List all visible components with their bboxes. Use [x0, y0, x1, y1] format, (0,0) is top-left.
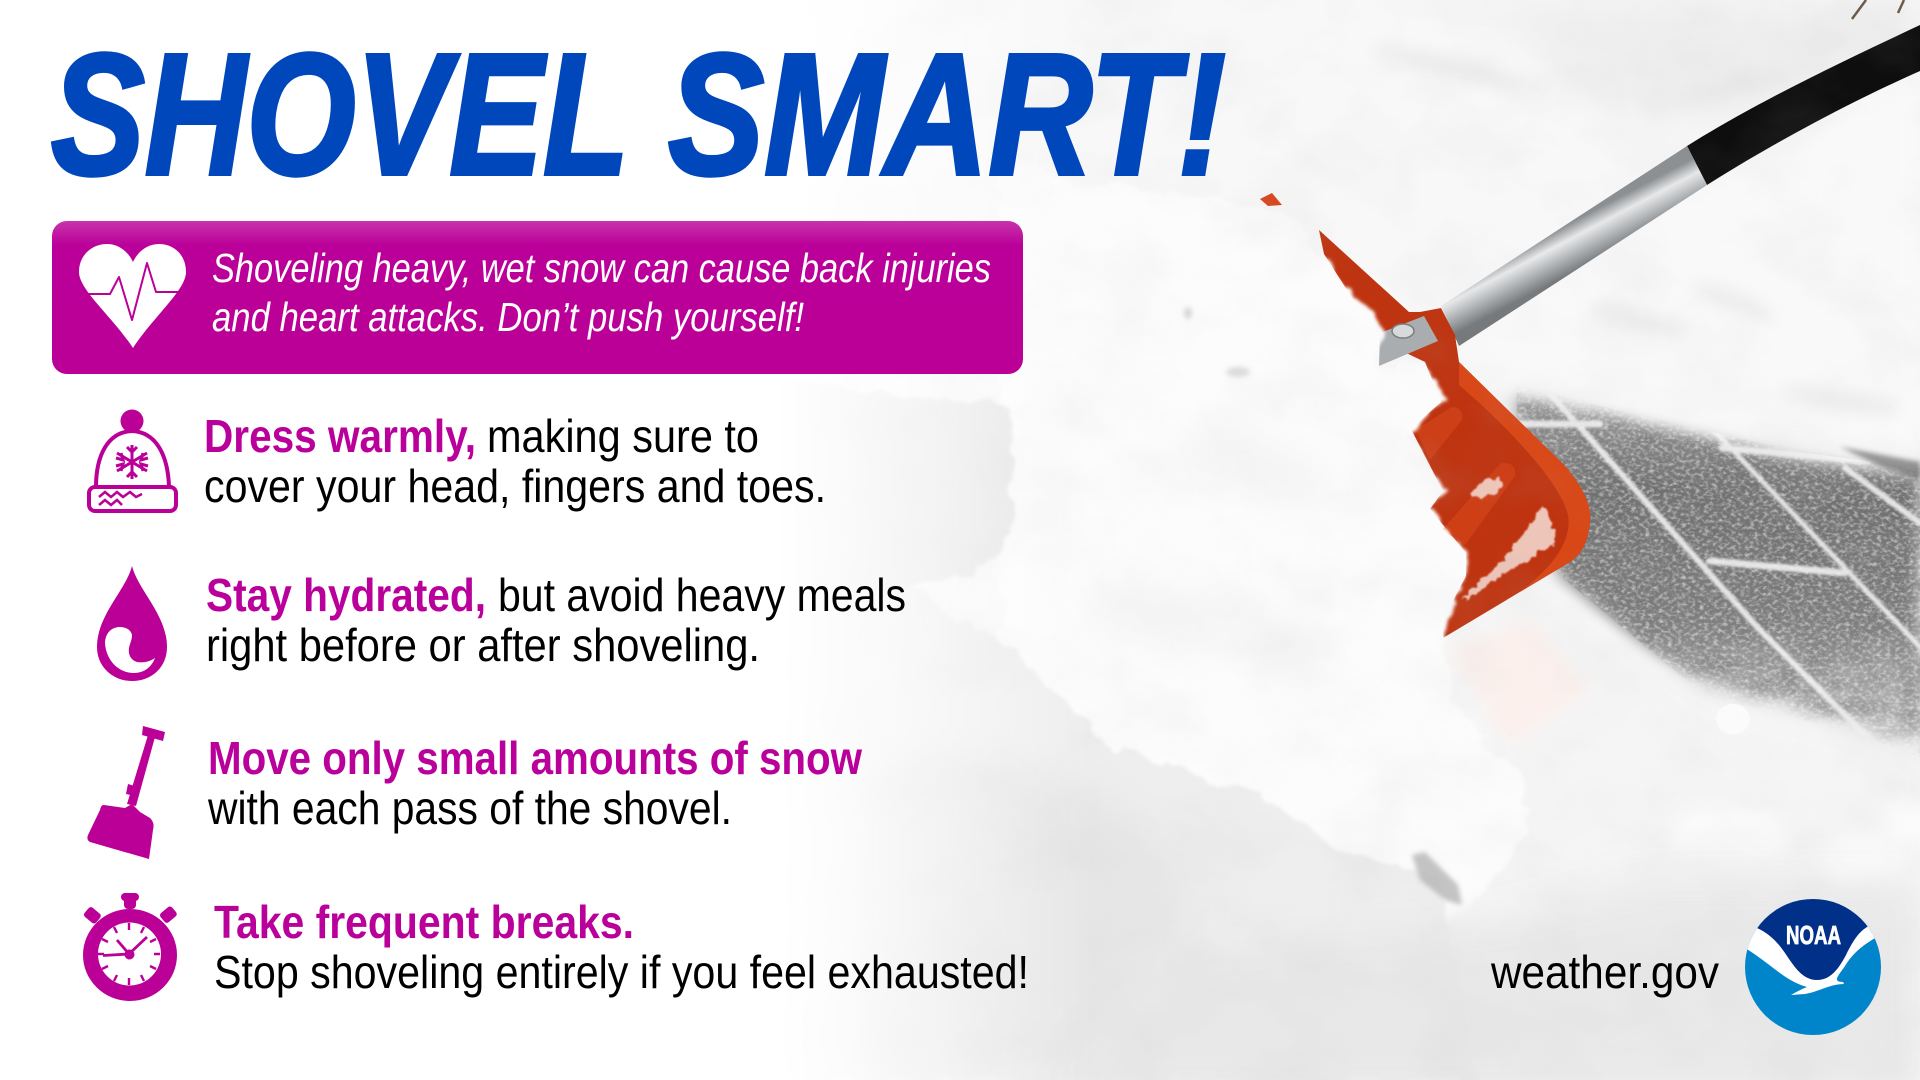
icon: winter hat: [89, 410, 176, 511]
banner text: [212, 245, 991, 340]
shovel: snow on blade: [1462, 478, 1556, 602]
icon: water drop: [97, 566, 167, 681]
twigs: [1852, 0, 1904, 19]
snow: pile shading: [1088, 419, 1344, 687]
title: [51, 17, 1226, 211]
shovel: black grip: [1687, 25, 1920, 185]
shovel: blade rim highlight: [1459, 362, 1590, 592]
text: move small amounts: with each pass of the shovel.: [207, 782, 732, 834]
title: SMART!: [668, 17, 1226, 211]
snow: top right field: [1480, 0, 1920, 130]
snow: left grey lump: [760, 380, 1017, 600]
website label: weather.gov: [1490, 946, 1719, 998]
text: stay hydrated: right before or after shoveling.: [206, 619, 760, 671]
text: dress warmly: [204, 410, 826, 512]
snow: lower grey mound: [760, 560, 1480, 1080]
snow ball: [1716, 704, 1750, 734]
text: dress warmly: Dress warmly,: [204, 410, 476, 462]
snow: light drift below driveway: [1400, 600, 1920, 1080]
shovel: bolt: [1392, 324, 1414, 338]
text: take frequent breaks: Take frequent breaks.: [214, 896, 634, 948]
shovel: blade tip: [1260, 193, 1282, 206]
snow: mid-grey mound: [860, 760, 1180, 1080]
shovel: metal bracket: [1379, 316, 1438, 366]
snow: dark top fringe of driveway: [1840, 447, 1920, 480]
banner text: Shoveling heavy, wet snow can cause back injuries: [212, 245, 991, 291]
icon: heart with pulse: [79, 244, 186, 348]
driveway texture and plow streaks: [1516, 392, 1920, 754]
icon: stopwatch: [83, 893, 178, 1001]
title: SHOVEL: [51, 17, 629, 211]
text: stay hydrated: but avoid heavy meals: [498, 569, 906, 621]
text: move small amounts: [207, 732, 862, 834]
snow: grey bottom band: [1000, 880, 1920, 1080]
text: take frequent breaks: [214, 896, 1029, 998]
text: dress warmly: cover your head, fingers and toes.: [204, 460, 826, 512]
snow: main pile over blade: [1000, 150, 1530, 1000]
left white fade: [0, 0, 1100, 1080]
NOAA logo: [1745, 899, 1881, 1035]
text: stay hydrated: Stay hydrated,: [206, 569, 486, 621]
NOAA logo: NOAA: [1786, 920, 1841, 950]
shovel: blade ribs: [1416, 407, 1515, 545]
icon: snow shovel: [87, 726, 165, 859]
text: move small amounts: Move only small amounts of snow: [208, 732, 862, 784]
driveway edge softening: [1500, 380, 1920, 790]
shovel: orange blade: [1319, 230, 1590, 638]
text: stay hydrated: [206, 569, 906, 671]
panel: warning banner: [52, 221, 1023, 374]
snow: shaded lumps above bank: [1371, 40, 1901, 417]
text: take frequent breaks: Stop shoveling entirely if you feel exhausted!: [214, 946, 1029, 998]
driveway asphalt: [1516, 386, 1920, 757]
banner text: and heart attacks. Don’t push yourself!: [212, 294, 804, 340]
snow: grey pits: [1184, 307, 1462, 905]
pink tinted snow under blade: [1450, 620, 1590, 745]
snow: mottled texture: [760, 0, 1920, 1080]
snow: bank above driveway: [1480, 90, 1920, 450]
snow: clumps bottom right: [1670, 798, 1920, 890]
shovel: silver shaft: [1441, 146, 1707, 346]
text: dress warmly: making sure to: [487, 410, 759, 462]
